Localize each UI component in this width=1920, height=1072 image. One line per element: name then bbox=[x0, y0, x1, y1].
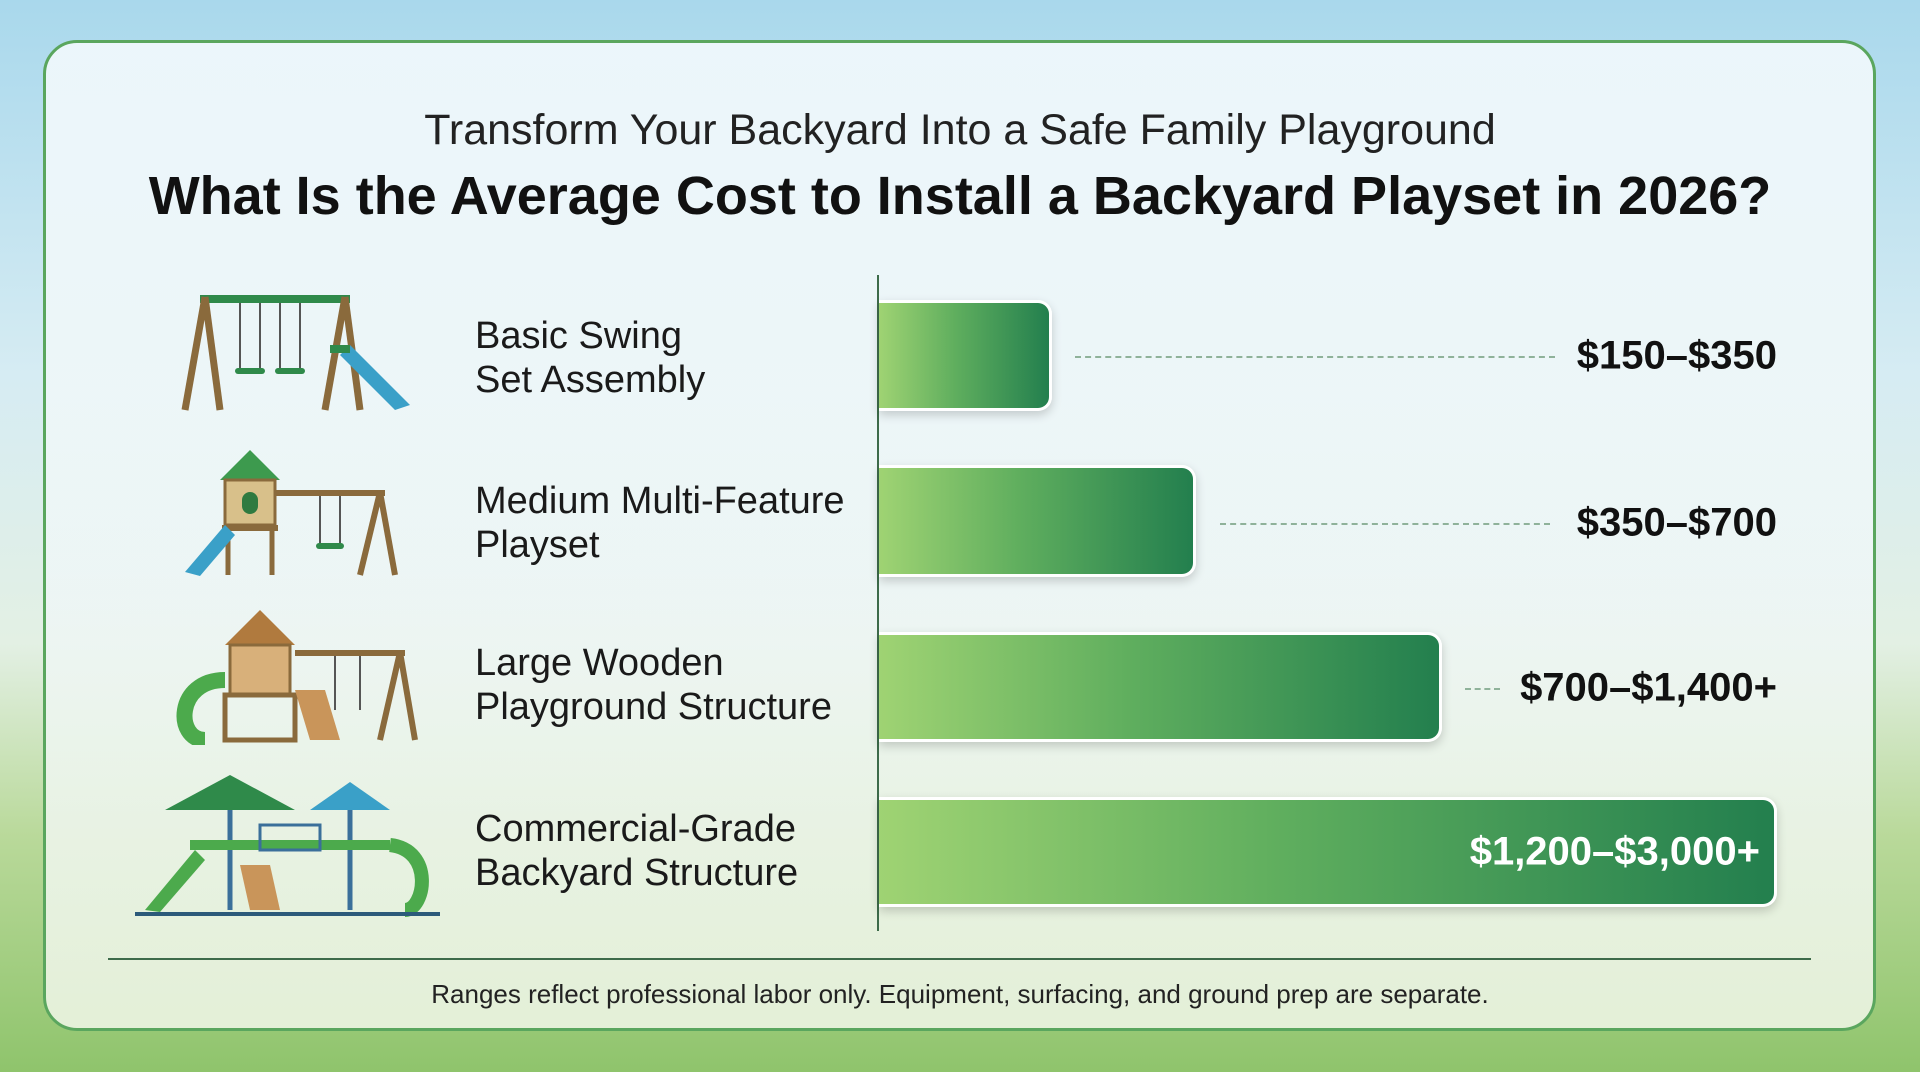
footnote: Ranges reflect professional labor only. Equipment, surfacing, and ground prep are separate. bbox=[431, 979, 1489, 1009]
price 2: $350–$700 bbox=[1577, 500, 1777, 544]
icon: commercial structure bbox=[135, 775, 440, 917]
label 1 bbox=[475, 315, 706, 401]
icon: basic swing set bbox=[182, 295, 410, 411]
label 3: Playground Structure bbox=[475, 686, 832, 728]
icon: medium playset bbox=[185, 450, 398, 576]
label 4: Backyard Structure bbox=[475, 852, 798, 894]
label 2 bbox=[475, 480, 845, 566]
label 4: Commercial-Grade bbox=[475, 808, 796, 850]
icon: large wooden structure bbox=[176, 610, 418, 745]
title: What Is the Average Cost to Install a Backyard Playset in 2026? bbox=[149, 166, 1771, 226]
label 3 bbox=[475, 642, 832, 728]
label 4 bbox=[475, 808, 798, 894]
price 3: $700–$1,400+ bbox=[1520, 666, 1777, 710]
axis bbox=[877, 275, 879, 931]
subtitle: Transform Your Backyard Into a Safe Family Playground bbox=[424, 106, 1496, 154]
label 1: Basic Swing bbox=[475, 315, 682, 357]
label 1: Set Assembly bbox=[475, 359, 705, 401]
label 2: Medium Multi-Feature bbox=[475, 480, 845, 522]
bar 3 bbox=[879, 632, 1442, 742]
bar 1 bbox=[879, 300, 1052, 411]
price 1: $150–$350 bbox=[1577, 334, 1777, 378]
label 2: Playset bbox=[475, 524, 600, 566]
bar 2 bbox=[879, 465, 1196, 577]
price 4: $1,200–$3,000+ bbox=[1470, 830, 1760, 874]
bar 4 bbox=[879, 797, 1777, 907]
label 3: Large Wooden bbox=[475, 642, 724, 684]
